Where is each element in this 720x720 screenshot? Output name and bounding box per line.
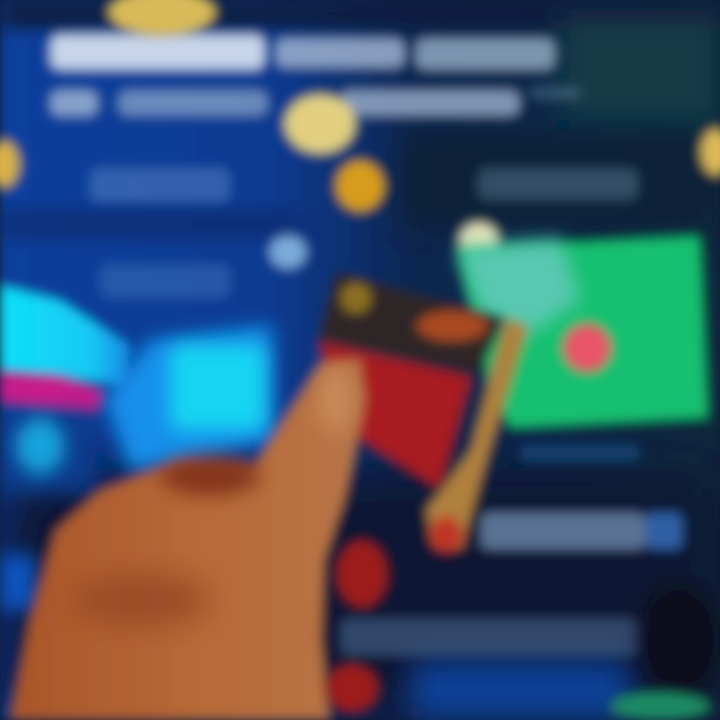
fingertip highlight — [317, 368, 353, 432]
payment card — [318, 272, 528, 553]
title text block — [50, 34, 580, 116]
knuckle shadow — [160, 456, 260, 496]
palm shading — [70, 574, 210, 626]
card orange mark — [416, 310, 488, 342]
cyan chart panels — [0, 285, 272, 470]
bottom right figure — [610, 584, 720, 720]
lower text rows — [340, 445, 683, 656]
left text rows — [90, 168, 230, 298]
card dark top — [318, 272, 505, 372]
green panel — [458, 236, 708, 428]
red circle marker — [563, 324, 611, 372]
card red tip — [430, 517, 462, 553]
card red body — [318, 340, 472, 490]
red fingernails — [326, 540, 388, 712]
card gold chip — [340, 282, 372, 314]
magenta bar — [0, 372, 102, 412]
card edge — [425, 318, 528, 550]
cyan circle — [0, 412, 95, 492]
hand pointing — [10, 358, 366, 720]
gold coins — [0, 0, 720, 269]
right text row — [478, 168, 638, 200]
